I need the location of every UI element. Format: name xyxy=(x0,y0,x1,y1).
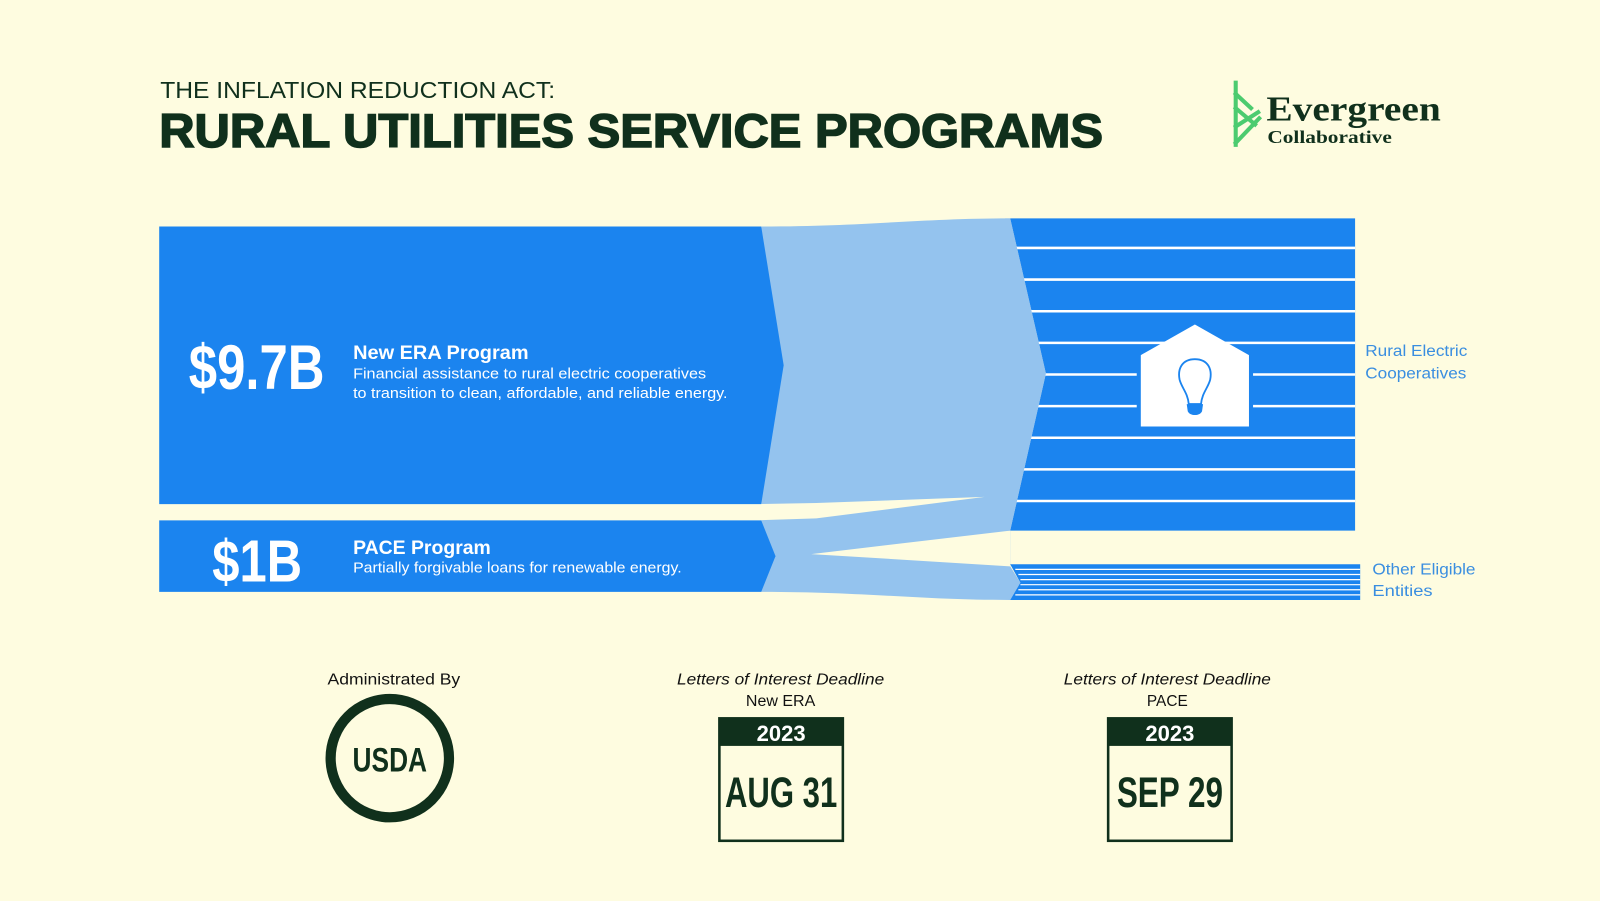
gap wedge between flows xyxy=(755,497,985,520)
bar: PACE Program: $1B xyxy=(212,528,302,595)
calendar: New ERA deadline xyxy=(677,672,884,841)
bar: New ERA Program: $9.7B xyxy=(189,333,325,403)
label: Other Eligible Entities xyxy=(1372,561,1476,600)
administrated by USDA: USDA xyxy=(353,741,427,779)
subtitle: THE INFLATION REDUCTION ACT: xyxy=(160,77,555,103)
label: Other Eligible Entities: Entities xyxy=(1372,583,1433,600)
label: Rural Electric Cooperatives xyxy=(1365,343,1467,383)
bar: New ERA Program: Financial assistance to rural electric cooperatives xyxy=(353,367,706,383)
icon: house with light bulb xyxy=(1141,324,1249,427)
logo: Evergreen Collaborative: Collaborative xyxy=(1267,127,1392,147)
calendar: PACE deadline: 2023 xyxy=(1145,721,1194,746)
label: Rural Electric Cooperatives: Rural Electric xyxy=(1365,343,1467,360)
block: Rural Electric Cooperatives xyxy=(1005,218,1355,531)
bar: PACE Program: Partially forgivable loans for renewable energy. xyxy=(353,560,682,576)
icon: evergreen branch xyxy=(1236,83,1259,145)
calendar: PACE deadline: SEP 29 xyxy=(1117,769,1223,817)
block: Other Eligible Entities xyxy=(1010,564,1360,600)
bar: PACE Program: PACE Program xyxy=(353,537,491,559)
flow: light band xyxy=(761,218,1046,600)
administrated by USDA xyxy=(328,672,461,817)
calendar: PACE deadline: Letters of Interest Deadline xyxy=(1064,672,1271,689)
label: Rural Electric Cooperatives: Cooperatives xyxy=(1365,366,1466,383)
bar: New ERA Program: New ERA Program xyxy=(353,342,529,364)
title: RURAL UTILITIES SERVICE PROGRAMS xyxy=(159,105,1103,157)
label: Other Eligible Entities: Other Eligible xyxy=(1372,561,1476,578)
bar: New ERA Program xyxy=(159,227,784,504)
logo: Evergreen Collaborative xyxy=(1236,83,1441,147)
sankey chart xyxy=(159,218,1476,600)
calendar: New ERA deadline: New ERA xyxy=(746,693,816,710)
calendar: New ERA deadline: AUG 31 xyxy=(725,769,837,817)
bar: New ERA Program: to transition to clean, affordable, and reliable energy. xyxy=(353,386,728,402)
bar: PACE Program xyxy=(159,520,776,595)
calendar: PACE deadline: PACE xyxy=(1147,693,1188,710)
icon: USDA circle xyxy=(331,699,449,817)
calendar: New ERA deadline: 2023 xyxy=(757,721,806,746)
calendar: PACE deadline xyxy=(1064,672,1271,841)
administrated by USDA: Administrated By xyxy=(328,672,461,689)
calendar: New ERA deadline: Letters of Interest Deadline xyxy=(677,672,884,689)
logo: Evergreen Collaborative: Evergreen xyxy=(1266,89,1441,128)
